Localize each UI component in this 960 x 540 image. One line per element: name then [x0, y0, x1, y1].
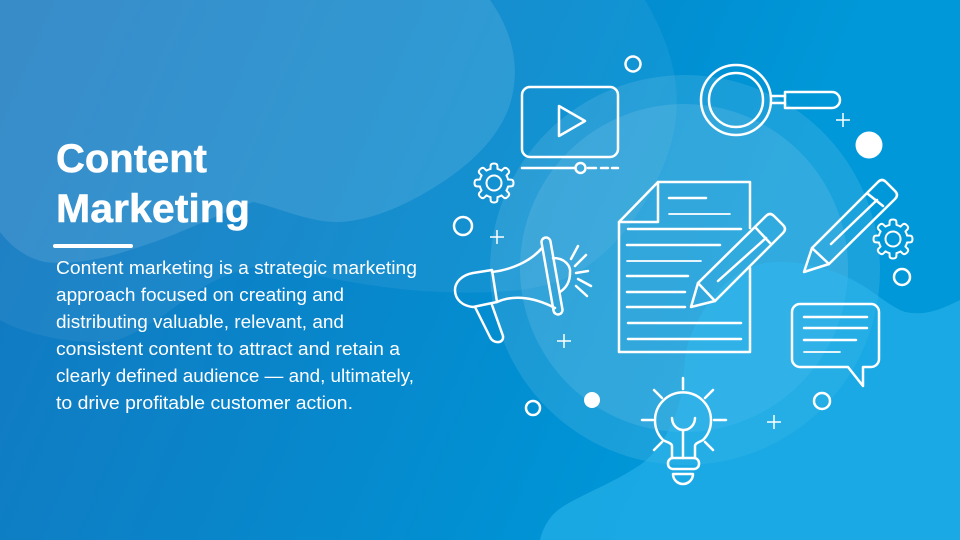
icon: gear left [474, 164, 514, 202]
body text: consistent content to attract and retain a [56, 339, 401, 359]
body text: Content marketing is a strategic marketing [56, 258, 417, 278]
icon: pencil right [804, 180, 897, 272]
title [56, 137, 250, 231]
body text: approach focused on creating and [56, 285, 344, 305]
icon: megaphone [455, 237, 591, 342]
decorative filled dots [584, 132, 882, 408]
title: Content [56, 137, 207, 181]
title: Marketing [56, 187, 250, 231]
icon: magnifying glass [701, 65, 840, 135]
body text: to drive profitable customer action. [56, 393, 353, 413]
decorative open circles [454, 56, 910, 415]
icon: light bulb [642, 378, 726, 484]
decorative plus signs [490, 113, 850, 429]
body text [56, 258, 417, 413]
icon: gear right [874, 220, 912, 258]
icon: video player [522, 87, 618, 173]
icon: document [619, 182, 750, 352]
icon: speech bubble [792, 304, 879, 386]
title underline [53, 244, 133, 248]
body text: distributing valuable, relevant, and [56, 312, 344, 332]
icon: pencil on document [691, 214, 785, 307]
body text: clearly defined audience — and, ultimately, [56, 366, 414, 386]
